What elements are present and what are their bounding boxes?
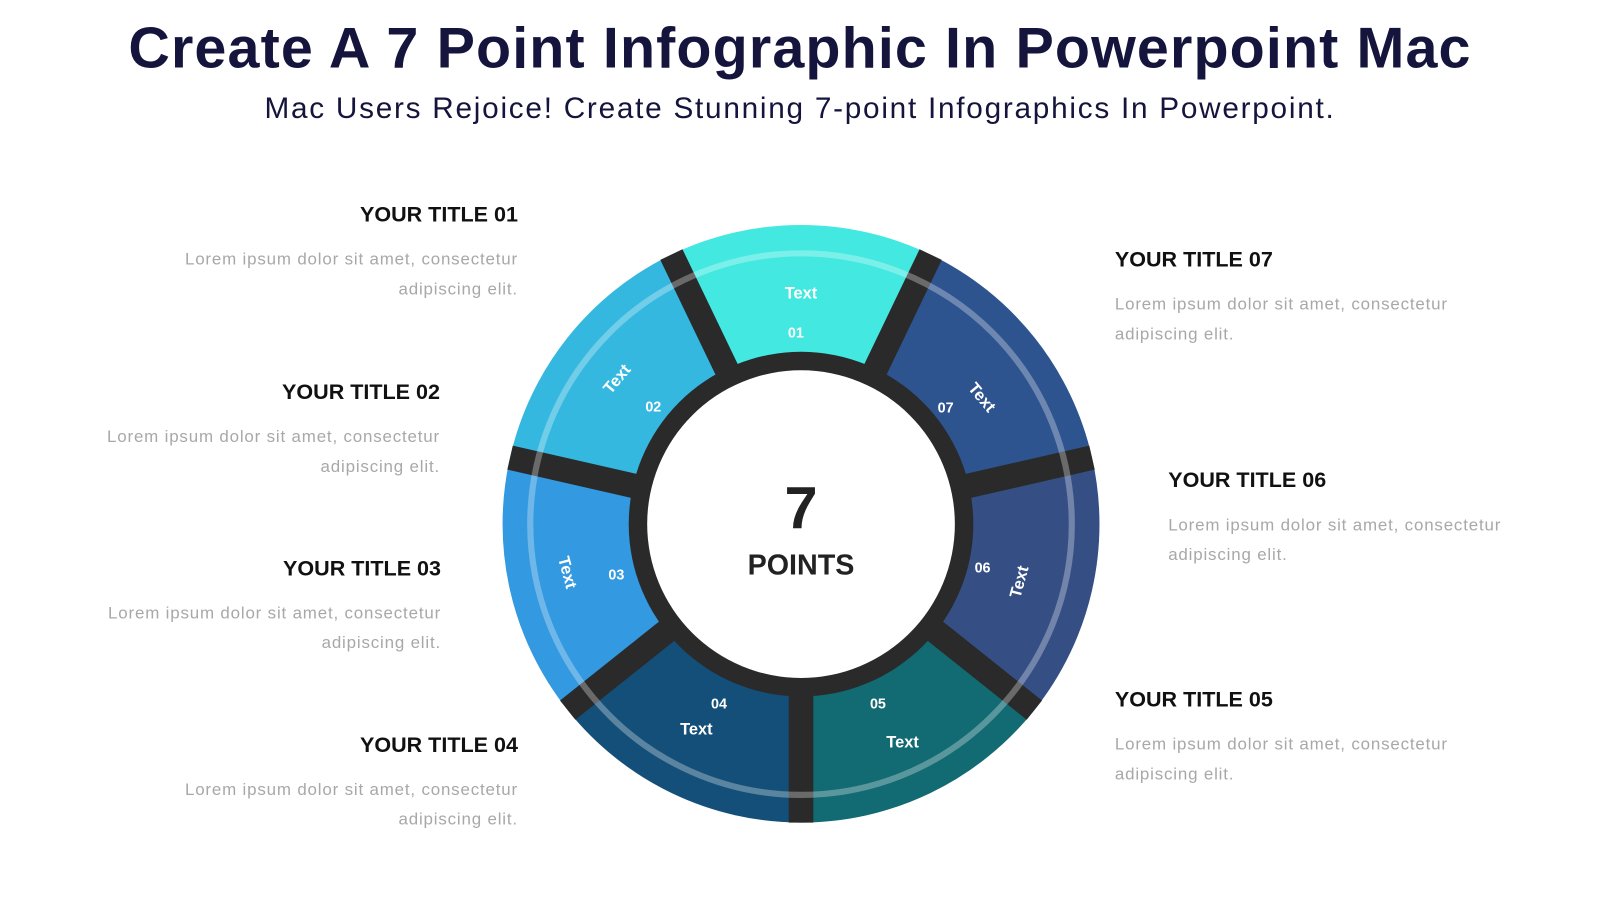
item 04: YOUR TITLE 04 (360, 733, 518, 757)
subtitle: Mac Users Rejoice! Create Stunning 7-point Infographics In Powerpoint. (264, 92, 1336, 125)
labels (554, 284, 1033, 752)
item 02: adipiscing elit. (321, 457, 440, 476)
item 03: adipiscing elit. (322, 634, 441, 652)
item 06: adipiscing elit. (1168, 546, 1288, 564)
center circle (647, 370, 955, 678)
item 05: Lorem ipsum dolor sit amet, consectetur (1115, 735, 1448, 754)
labels: Text (554, 555, 580, 591)
labels: Text (1007, 563, 1033, 600)
item 04: adipiscing elit. (399, 810, 518, 829)
item 03: YOUR TITLE 03 (283, 557, 441, 581)
item 05: adipiscing elit. (1115, 765, 1234, 784)
item 06: YOUR TITLE 06 (1168, 469, 1326, 492)
item 06: Lorem ipsum dolor sit amet, consectetur (1168, 516, 1501, 534)
labels: 03 (608, 567, 624, 583)
labels: 07 (938, 400, 954, 416)
labels: Text (964, 379, 999, 416)
labels: Text (680, 720, 713, 738)
item 01 (185, 203, 518, 298)
segment 06 (801, 458, 1099, 710)
segment 01 (671, 225, 931, 524)
labels: 06 (975, 560, 991, 576)
labels: Text (785, 284, 818, 302)
segment 03 (503, 458, 801, 710)
labels: 01 (788, 325, 804, 341)
title: Create A 7 Point Infographic In Powerpoint Mac (128, 15, 1472, 80)
segment 04 (568, 524, 801, 823)
center circle: POINTS (748, 549, 854, 581)
labels: Text (886, 734, 919, 752)
item 01: adipiscing elit. (399, 280, 518, 298)
item 03 (108, 557, 441, 652)
labels: 02 (645, 399, 661, 415)
item 07: adipiscing elit. (1115, 325, 1234, 344)
segment 02 (510, 255, 801, 524)
item 01: YOUR TITLE 01 (360, 203, 518, 227)
item 07 (1115, 248, 1448, 344)
item 07: YOUR TITLE 07 (1115, 248, 1273, 272)
item 04: Lorem ipsum dolor sit amet, consectetur (185, 781, 518, 799)
item 02 (107, 381, 440, 476)
item 05 (1115, 688, 1448, 784)
segment 07 (801, 255, 1092, 524)
item 06 (1168, 469, 1501, 564)
item 05: YOUR TITLE 05 (1115, 688, 1273, 712)
labels: Text (600, 361, 635, 397)
item 02: Lorem ipsum dolor sit amet, consectetur (107, 428, 440, 446)
labels: 04 (711, 697, 727, 713)
labels: 05 (870, 697, 886, 713)
segment 05 (801, 524, 1034, 823)
center circle: 7 (784, 474, 818, 541)
item 04 (185, 733, 518, 829)
item 07: Lorem ipsum dolor sit amet, consectetur (1115, 295, 1448, 314)
item 03: Lorem ipsum dolor sit amet, consectetur (108, 604, 441, 623)
item 02: YOUR TITLE 02 (282, 381, 440, 404)
item 01: Lorem ipsum dolor sit amet, consectetur (185, 250, 518, 269)
